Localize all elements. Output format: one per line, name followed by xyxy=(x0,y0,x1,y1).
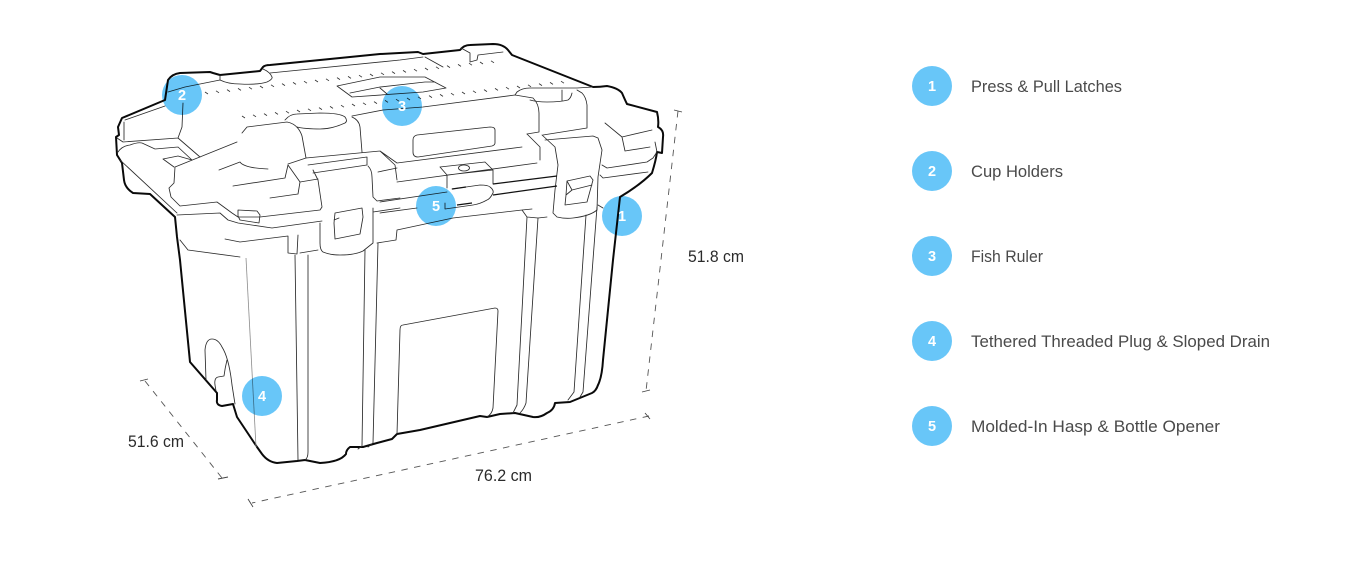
legend item 3 xyxy=(912,236,1043,276)
legend item 5 xyxy=(912,406,1220,446)
legend item 2: Cup Holders xyxy=(971,162,1063,181)
right front cup holder xyxy=(515,87,593,135)
hasp and bottle opener xyxy=(397,162,557,209)
legend item 3: Fish Ruler xyxy=(971,247,1043,266)
cooler outer silhouette xyxy=(116,44,663,463)
marker 4 xyxy=(242,376,282,416)
left latch xyxy=(308,157,400,255)
marker 2: 2 xyxy=(178,88,186,104)
dimension: width xyxy=(248,413,650,507)
marker 3 xyxy=(382,86,422,126)
lid label plate xyxy=(413,127,495,157)
dimension: height xyxy=(642,110,744,392)
legend item 5: 5 xyxy=(928,419,936,435)
dimension: height: 51.8 cm xyxy=(688,248,744,266)
legend item 5: Molded-In Hasp & Bottle Opener xyxy=(971,417,1220,436)
drain plug xyxy=(205,339,235,404)
lid lower lip xyxy=(177,192,547,257)
fish ruler tick marks xyxy=(205,61,564,118)
marker 5: 5 xyxy=(432,199,440,215)
left rear cup holder xyxy=(168,69,272,92)
left lid handle xyxy=(169,142,322,217)
legend item 1 xyxy=(912,66,1122,106)
front cup holder xyxy=(242,113,346,164)
legend item 4: 4 xyxy=(928,334,936,350)
marker 3: 3 xyxy=(398,99,406,115)
right corner handle xyxy=(598,123,657,208)
dimension: depth: 51.6 cm xyxy=(128,433,184,451)
fish ruler window xyxy=(337,77,446,97)
dimension: width: 76.2 cm xyxy=(475,467,532,485)
legend item 4 xyxy=(912,321,1270,361)
legend item 1: Press & Pull Latches xyxy=(971,77,1122,96)
legend item 2: 2 xyxy=(928,164,936,180)
cooler side seam xyxy=(246,258,256,447)
left side tab xyxy=(238,210,260,223)
left latch button xyxy=(334,208,363,239)
dimension: depth xyxy=(128,379,228,479)
marker 4: 4 xyxy=(258,389,266,405)
legend item 3: 3 xyxy=(928,249,936,265)
marker 1 xyxy=(602,196,642,236)
cooler line drawing xyxy=(116,44,663,463)
marker 2 xyxy=(162,75,202,115)
marker 5 xyxy=(416,186,456,226)
lid centre ridge xyxy=(306,95,539,180)
legend item 4: Tethered Threaded Plug & Sloped Drain xyxy=(971,332,1270,351)
legend item 2 xyxy=(912,151,1063,191)
legend item 1: 1 xyxy=(928,79,936,95)
right latch button xyxy=(565,176,593,205)
front panel recess xyxy=(397,308,498,434)
left corner handle xyxy=(117,103,200,213)
legend xyxy=(912,66,1270,446)
body ribs xyxy=(295,207,597,460)
right latch xyxy=(527,134,602,218)
marker 1: 1 xyxy=(618,209,626,225)
lid top edge details xyxy=(270,48,503,73)
